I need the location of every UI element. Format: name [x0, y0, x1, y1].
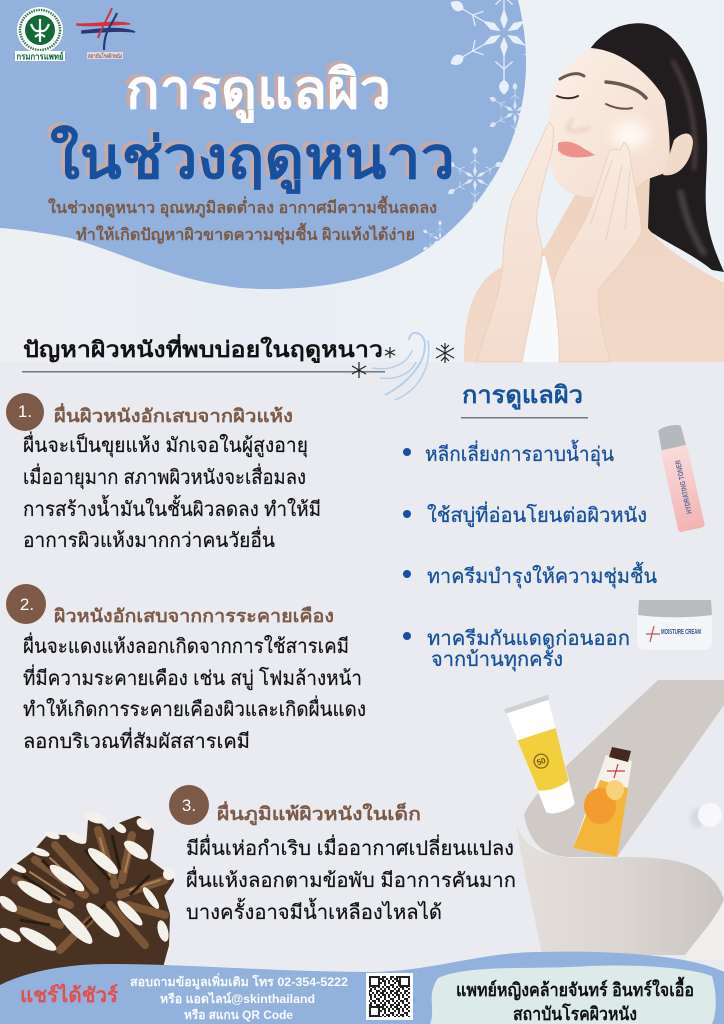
title: การดูแลผิว: [122, 57, 387, 120]
item 1: dry skin eczema: อาการผิวแห้งมากกว่าคนวัยอื่น: [23, 526, 275, 552]
shoulders and chest: [464, 175, 724, 362]
left hand: [476, 122, 554, 362]
lips: [558, 142, 595, 157]
skin care list: [403, 440, 657, 672]
intro text: ในช่วงฤดูหนาว อุณหภูมิลดต่ำลง อากาศมีความชื้นลดลง: [48, 195, 437, 219]
nose shadow: [567, 118, 590, 131]
QR code: [366, 973, 413, 1020]
item 1: dry skin eczema: [6, 393, 321, 552]
ear: [663, 134, 693, 175]
item 2: irritant dermatitis: [6, 584, 366, 753]
intro text: ทำให้เกิดปัญหาผิวขาดความชุ่มชื้น ผิวแห้งได้ง่าย: [76, 222, 415, 245]
title: ในช่วงฤดูหนาว: [50, 124, 455, 194]
face: [548, 48, 670, 197]
skin care heading: [461, 382, 588, 418]
share slogan: แชร์ได้ชัวร์: [20, 983, 118, 1007]
product: pink toner bottle: [656, 423, 705, 533]
skin care heading: การดูแลผิว: [462, 382, 583, 410]
item 2: irritant dermatitis: ทำให้เกิดการระคายเคืองผิวและเกิดผื่นแดง: [23, 695, 366, 721]
item 3: atopic dermatitis in children: [169, 785, 516, 924]
contact text: หรือ สแกน QR Code: [184, 1008, 293, 1022]
logo: department of medical services: [15, 7, 65, 62]
title: การดูแลผิว: [126, 60, 391, 123]
skin care list: ทาครีมบำรุงให้ความชุ่มชื้น: [427, 562, 657, 589]
item 2: irritant dermatitis: 2.: [20, 595, 34, 614]
item 1: dry skin eczema: การสร้างน้ำมันในชั้นผิวลดลง ทำให้มี: [23, 495, 321, 521]
logo: institute of dermatology: [77, 8, 135, 60]
hair: [588, 23, 724, 272]
skin care list: จากบ้านทุกครั้ง: [431, 645, 563, 672]
logo: institute of dermatology: สถาบันโรคผิวหนัง: [88, 52, 122, 60]
item 3: atopic dermatitis in children: มีผื่นเห่อกำเริบ เมื่ออากาศเปลี่ยนแปลง: [186, 834, 514, 860]
item 3: atopic dermatitis in children: ผื่นภูมิแพ้ผิวหนังในเด็ก: [216, 801, 421, 826]
section heading: common winter skin problems: ปัญหาผิวหนังที่พบบ่อยในฤดูหนาว: [23, 333, 383, 364]
contact text: สอบถามข้อมูลเพิ่มเติม โทร 02-354-5222: [130, 973, 348, 990]
item 2: irritant dermatitis: ผิวหนังอักเสบจากการระคายเคือง: [54, 606, 334, 626]
ribbon decoration: [516, 680, 724, 960]
photo: woman touching her face: [0, 0, 724, 362]
skin care list: ใช้สบู่ที่อ่อนโยนต่อผิวหนัง: [427, 501, 647, 528]
pine cone: [0, 810, 175, 1000]
item 3: atopic dermatitis in children: บางครั้งอาจมีน้ำเหลืองไหลได้: [186, 898, 442, 924]
title: ในช่วงฤดูหนาว: [46, 121, 451, 191]
item 2: irritant dermatitis: ที่มีความระคายเคือง เช่น สบู่ โฟมล้างหน้า: [23, 664, 362, 691]
item 1: dry skin eczema: ผื่นผิวหนังอักเสบจากผิวแห้ง: [53, 403, 293, 426]
contact text: หรือ แอดไลน์@skinthailand: [160, 991, 315, 1006]
intro text: [48, 195, 437, 245]
skin care list: หลีกเลี่ยงการอาบน้ำอุ่น: [425, 440, 614, 467]
product: flower hand cream: [573, 747, 632, 857]
snowflakes: [423, 0, 526, 250]
author panel: สถาบันโรคผิวหนัง: [513, 1003, 637, 1024]
right hand: [553, 142, 642, 362]
author panel: แพทย์หญิงคล้ายจันทร์ อินทร์ใจเอื้อ: [456, 976, 694, 1001]
item 1: dry skin eczema: ผื่นจะเป็นขุยแห้ง มักเจอในผู้สูงอายุ: [23, 431, 308, 458]
item 2: irritant dermatitis: ผื่นจะแดงแห้งลอกเกิดจากการใช้สารเคมี: [23, 632, 349, 658]
pearl: [690, 803, 722, 828]
footer band: [0, 952, 724, 1024]
product: moisture cream jar: [637, 600, 712, 650]
eyebrows and eyes: [557, 74, 646, 109]
item 3: atopic dermatitis in children: ผื่นแห้งลอกตามข้อพับ มีอาการคันมาก: [186, 866, 516, 892]
product: sunscreen tube: 50: [536, 756, 547, 767]
contact text: [130, 973, 348, 1022]
item 3: atopic dermatitis in children: 3.: [182, 796, 196, 815]
blue header shape: [0, 0, 526, 289]
product: sunscreen tube: [504, 695, 584, 819]
item 2: irritant dermatitis: ลอกบริเวณที่สัมผัสสารเคมี: [23, 727, 250, 753]
item 1: dry skin eczema: 1.: [18, 402, 32, 421]
author panel: [430, 965, 716, 1024]
item 1: dry skin eczema: เมื่ออายุมาก สภาพผิวหนังจะเสื่อมลง: [23, 463, 306, 490]
icon: wind and snow: [352, 333, 454, 400]
product: moisture cream jar: MOISTURE CREAM: [661, 629, 701, 636]
title: [46, 57, 455, 194]
logo: department of medical services: กรมการแพทย์: [16, 50, 64, 62]
product: pink toner bottle: HYDRATING TONER: [673, 459, 694, 515]
towel: [522, 256, 562, 362]
skin care list: ทาครีมกันแดดก่อนออก: [427, 628, 630, 650]
